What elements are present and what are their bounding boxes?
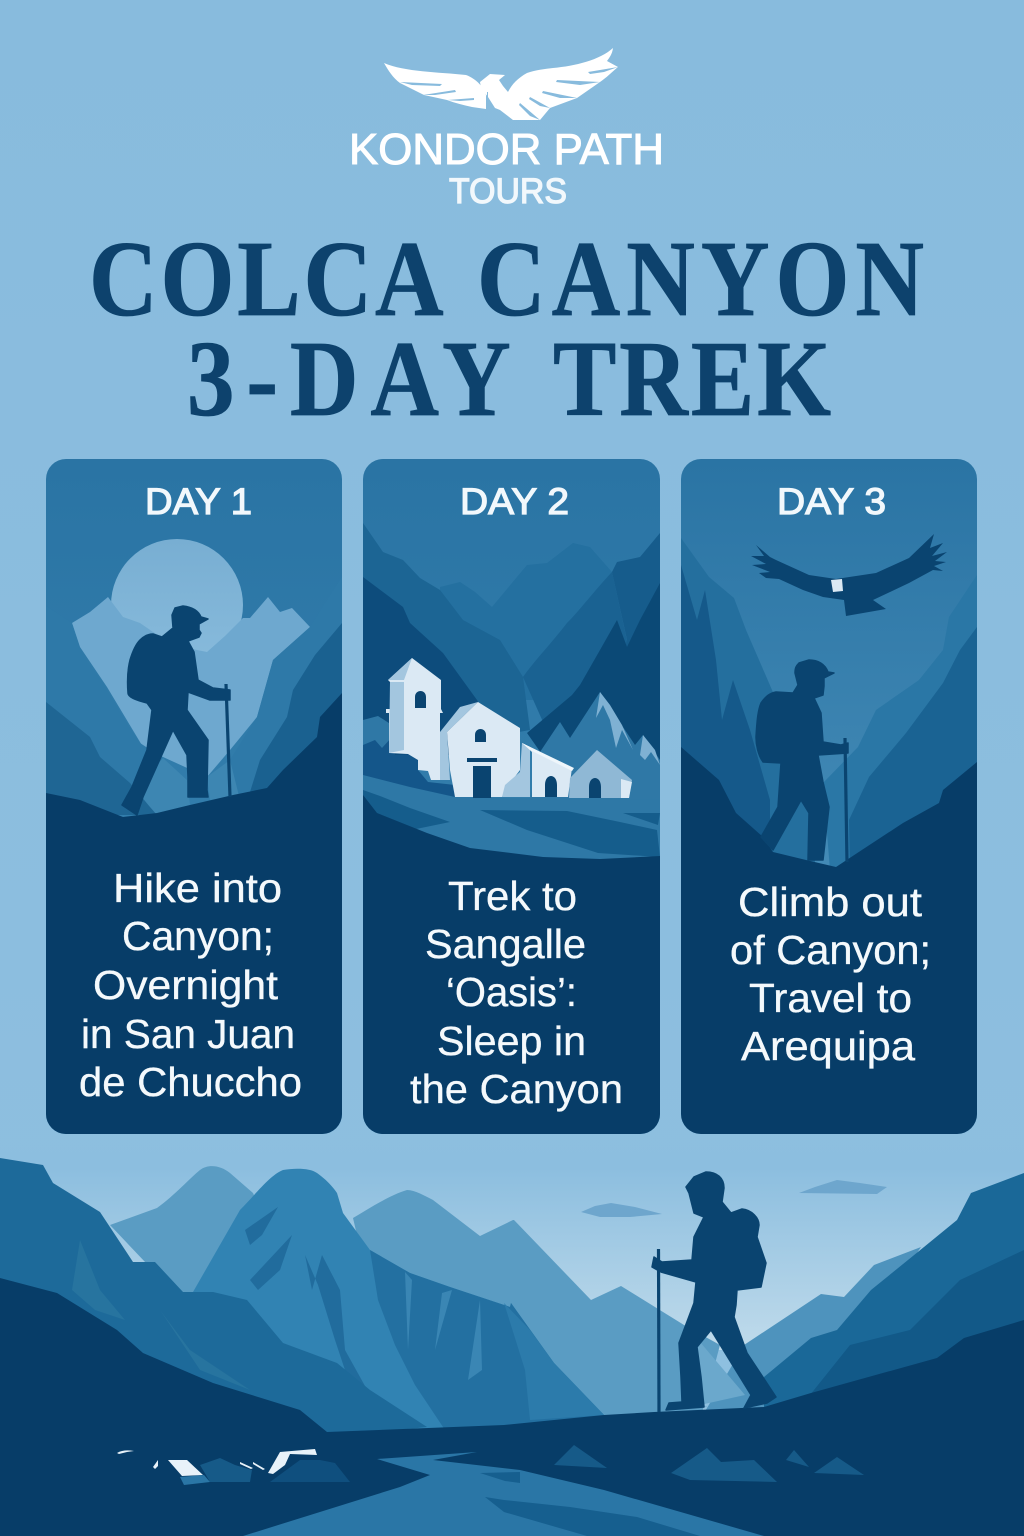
text field [363, 795, 660, 1134]
hiker [652, 1172, 776, 1412]
left ridge [72, 623, 146, 749]
central mountain right face [370, 1250, 604, 1430]
description: de Chuccho [79, 1059, 302, 1105]
description: Arequipa [741, 1023, 915, 1069]
left darker ridge [681, 566, 770, 835]
ground [363, 775, 456, 800]
description: Sangalle [425, 921, 586, 967]
description: Travel to [749, 975, 912, 1021]
left big ridge [0, 1158, 427, 1440]
far central peak [523, 572, 627, 720]
title: TREK [553, 319, 831, 439]
description: ‘Oasis’: [446, 969, 577, 1015]
panel: day 2 [363, 459, 660, 1134]
right dark mountain [527, 584, 660, 760]
icon: church and village [386, 658, 632, 798]
left dark mountain [363, 577, 478, 755]
description [730, 879, 931, 1069]
icon: sun [111, 539, 243, 652]
description [79, 865, 302, 1105]
title: 3-DAY [187, 319, 511, 439]
icon: condor [751, 534, 947, 616]
description: Canyon; [122, 913, 274, 959]
right foreground ridge [250, 623, 342, 800]
hiker [756, 660, 848, 862]
heading: DAY 1 [145, 481, 252, 522]
hiker [122, 606, 230, 815]
left mountain [363, 524, 530, 732]
left near-hiker mountain [504, 1303, 604, 1420]
left foreground ridge [46, 702, 157, 815]
right ridge [823, 575, 977, 870]
snowy peaks [540, 692, 660, 790]
brand subtitle: TOURS [449, 172, 567, 211]
foreground ground [0, 1278, 1024, 1536]
sky [0, 1136, 1024, 1350]
title: COLCA [89, 219, 444, 339]
clouds [581, 1180, 887, 1217]
ground [46, 693, 342, 1134]
description: in San Juan [81, 1011, 295, 1057]
white rocks [117, 1449, 317, 1476]
right ridge [230, 627, 310, 794]
description: Climb out [738, 879, 923, 925]
description: the Canyon [410, 1066, 623, 1112]
left ridge [681, 538, 815, 870]
description: Hike into [113, 865, 282, 911]
far mountains [72, 597, 310, 777]
title: CANYON [477, 219, 924, 339]
central mountain [193, 1169, 604, 1440]
far mountains [110, 1166, 300, 1320]
heading: DAY 3 [777, 481, 886, 522]
left hills and bushes [363, 716, 389, 748]
right darker ridge [849, 627, 977, 870]
icon: condor emblem [384, 48, 618, 120]
logo: Kondor Path Tours [349, 48, 664, 211]
description: of Canyon; [730, 927, 931, 973]
heading: DAY 2 [460, 481, 569, 522]
panel: day 1 [46, 459, 342, 1134]
title [89, 219, 924, 439]
back mountains [440, 543, 620, 700]
bottom landscape [0, 1136, 1024, 1536]
central mountain streaks [245, 1207, 370, 1395]
right ridge [764, 1173, 1024, 1420]
panel: day 3 [681, 459, 977, 1134]
description: Overnight [93, 962, 279, 1008]
description: Trek to [448, 873, 577, 919]
valley hump [144, 758, 238, 813]
brand name: KONDOR PATH [349, 125, 664, 174]
right back mountain [612, 533, 660, 645]
river [243, 1452, 764, 1536]
rocks [200, 1445, 864, 1482]
description: Sleep in [437, 1018, 586, 1064]
description [410, 873, 623, 1112]
left ground [681, 747, 977, 1134]
